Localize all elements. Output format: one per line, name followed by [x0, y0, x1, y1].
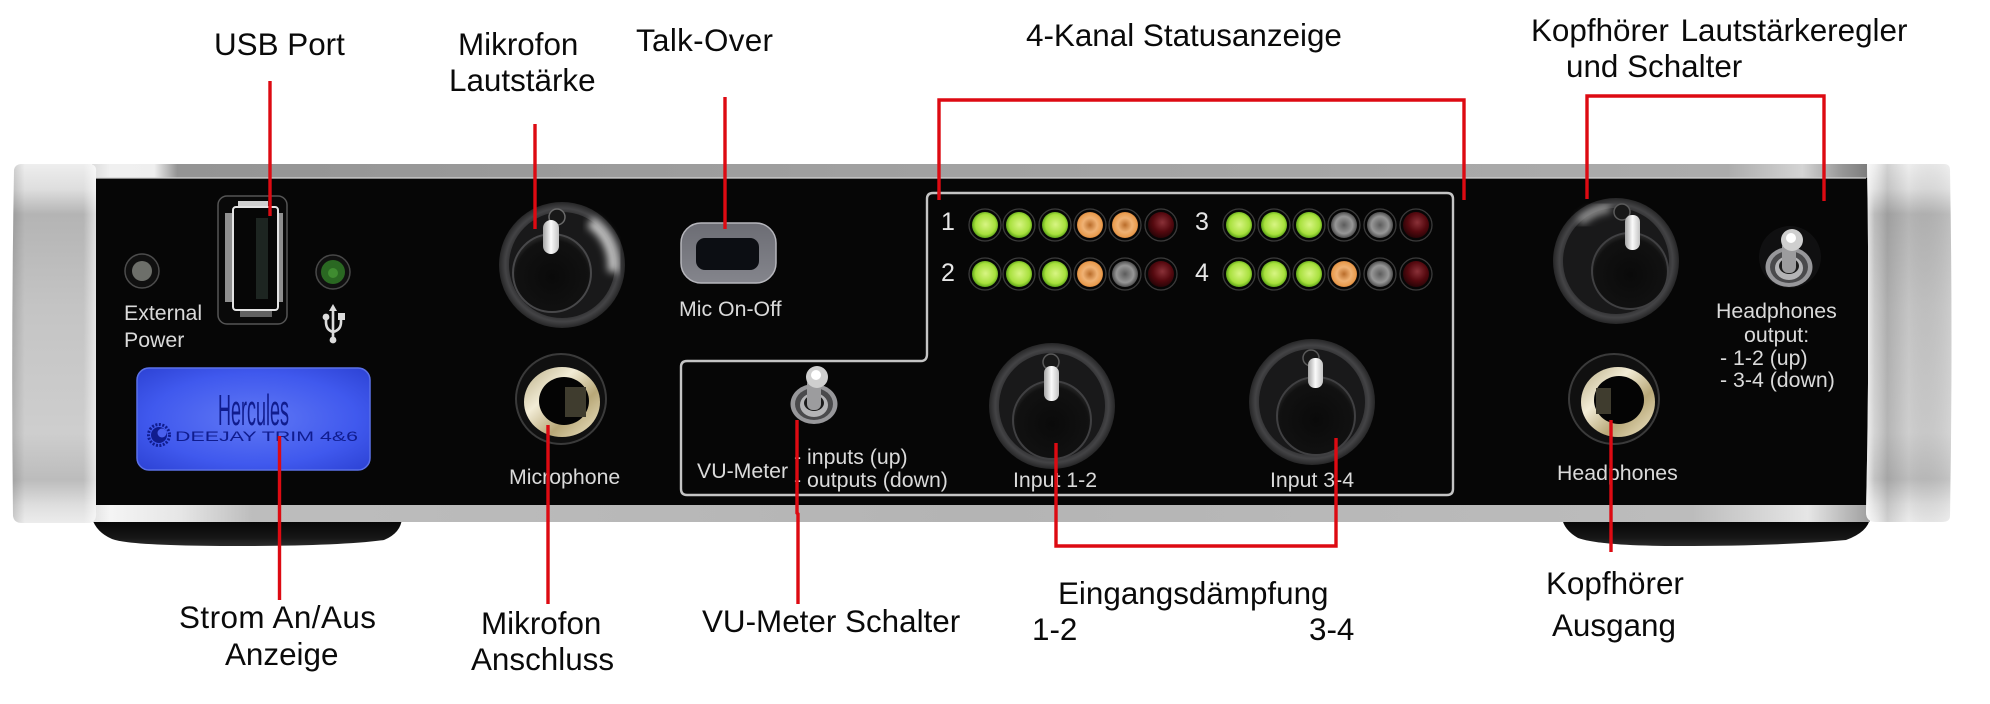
label: Microphone: Microphone: [509, 465, 620, 489]
label: External Power: External: [124, 301, 202, 325]
USB port: [218, 196, 287, 324]
LCD logo: sun: [148, 424, 170, 446]
label: VU-Meter Schalter: VU-Meter Schalter: [702, 604, 960, 639]
label: Mikrofon Lautstärke: Mikrofon: [458, 27, 578, 62]
channel numbers: 1: [941, 208, 955, 236]
label: External Power: [124, 301, 202, 352]
leader: Mikrofon Anschluss: [546, 425, 550, 604]
leader: USB Port: [268, 81, 272, 216]
label: Mikrofon Anschluss: Mikrofon: [481, 606, 601, 641]
label: Kopfhörer Ausgang: [1546, 566, 1684, 643]
bracket: Kopfhörer Lautstärkeregler und Schalter: [1587, 96, 1824, 201]
control outline on panel: [681, 193, 1453, 495]
label: Eingangsdämpfung 1-2 3-4: [1032, 576, 1354, 647]
leader: VU-Meter Schalter: [797, 420, 798, 604]
LCD model: Deejay Trim 4&6: DEEJAY TRIM 4&6: [175, 429, 358, 444]
LED meter channel 3: [1223, 209, 1432, 241]
label: USB Port: USB Port: [214, 27, 345, 62]
label: Talk-Over: Talk-Over: [636, 23, 773, 58]
channel numbers: 2: [941, 259, 955, 287]
channel numbers: [941, 208, 1209, 287]
callout lines: [270, 81, 1824, 604]
label: Headphones output: Headphones: [1716, 299, 1837, 323]
leader: Mikrofon Lautstärke: [533, 124, 537, 229]
label: Mikrofon Lautstärke: Lautstärke: [449, 63, 596, 98]
label: Input 1-2: Input 1-2: [1013, 468, 1097, 492]
LCD display: [137, 368, 370, 470]
leader: Strom An/Aus: [278, 436, 281, 600]
label: Headphones output: [1716, 299, 1837, 392]
label: Headphones output: output:: [1744, 323, 1809, 347]
label: VU-Meter inputs and outputs: [697, 445, 948, 492]
label: Headphones output: - 1-2 (up): [1720, 346, 1808, 370]
label: Strom An/Aus Anzeige: Anzeige: [225, 637, 338, 672]
label: Eingangsdämpfung 1-2 3-4: 3-4: [1309, 612, 1354, 647]
label: Mic On-Off: Mic On-Off: [679, 297, 782, 321]
label: Eingangsdämpfung 1-2 3-4: 1-2: [1032, 612, 1077, 647]
headphone output switch: [1759, 226, 1821, 288]
right silver end cap: [1866, 164, 1952, 522]
label: VU-Meter inputs and outputs: - outputs (down): [794, 468, 948, 492]
label: Mikrofon Lautstärke: [449, 27, 596, 98]
icon: USB trident: [323, 304, 345, 343]
bracket: Eingangsdämpfung: [1056, 438, 1336, 546]
LCD display: Hercules: [218, 386, 289, 435]
label: Input 3-4: Input 3-4: [1270, 468, 1354, 492]
label: 4-Kanal Statusanzeige: 4-Kanal Statusanzeige: [1026, 18, 1342, 53]
label: VU-Meter inputs and outputs: VU-Meter: [697, 459, 788, 483]
external power LED: [125, 254, 159, 288]
LED meter channel 1: [969, 209, 1177, 241]
label: Mikrofon Anschluss: [471, 606, 614, 677]
label: Headphones output: - 3-4 (down): [1720, 368, 1835, 392]
channel numbers: 3: [1195, 208, 1209, 236]
microphone volume knob: [499, 202, 625, 328]
label: Kopfhörer Lautstärkeregler und Schalter: [1531, 13, 1907, 84]
leader: Kopfhörer Ausgang: [1609, 420, 1613, 552]
LED meter channel 4: [1223, 258, 1432, 290]
label: Kopfhörer Ausgang: Ausgang: [1552, 608, 1676, 643]
rubber feet: [92, 518, 1870, 546]
USB status LED: [316, 255, 350, 289]
bottom silver bar: [92, 504, 1870, 522]
VU-meter toggle switch: [790, 366, 838, 424]
talk-over button: [681, 223, 776, 283]
label: Kopfhörer Ausgang: Kopfhörer: [1546, 566, 1684, 601]
microphone jack: [516, 354, 606, 444]
label: Mikrofon Anschluss: Anschluss: [471, 642, 614, 677]
left silver end cap: [12, 164, 96, 523]
label: VU-Meter inputs and outputs: - inputs (up): [794, 445, 908, 469]
input 1-2 knob: [989, 343, 1115, 469]
label: Strom An/Aus Anzeige: [179, 600, 376, 672]
label: Kopfhörer Lautstärkeregler und Schalter: Kopfhörer Lautstärkeregler: [1531, 13, 1907, 48]
label: Eingangsdämpfung 1-2 3-4: Eingangsdämpfung: [1058, 576, 1329, 611]
black front panel: [95, 178, 1868, 505]
input 3-4 knob: [1249, 339, 1375, 465]
device body: [12, 164, 1952, 546]
label: Strom An/Aus Anzeige: Strom An/Aus: [179, 600, 376, 635]
LED meter channel 2: [969, 258, 1177, 290]
label: Kopfhörer Lautstärkeregler und Schalter: und Schalter: [1566, 49, 1742, 84]
leader: Talk-Over: [723, 97, 727, 229]
bracket: 4-Kanal Statusanzeige: [939, 100, 1464, 200]
headphone jack: [1569, 354, 1659, 444]
label: External Power: Power: [124, 328, 184, 352]
headphone volume knob: [1553, 198, 1679, 324]
top silver bar: [92, 164, 1870, 179]
channel numbers: 4: [1195, 259, 1209, 287]
label: Headphones: Headphones: [1557, 461, 1678, 485]
